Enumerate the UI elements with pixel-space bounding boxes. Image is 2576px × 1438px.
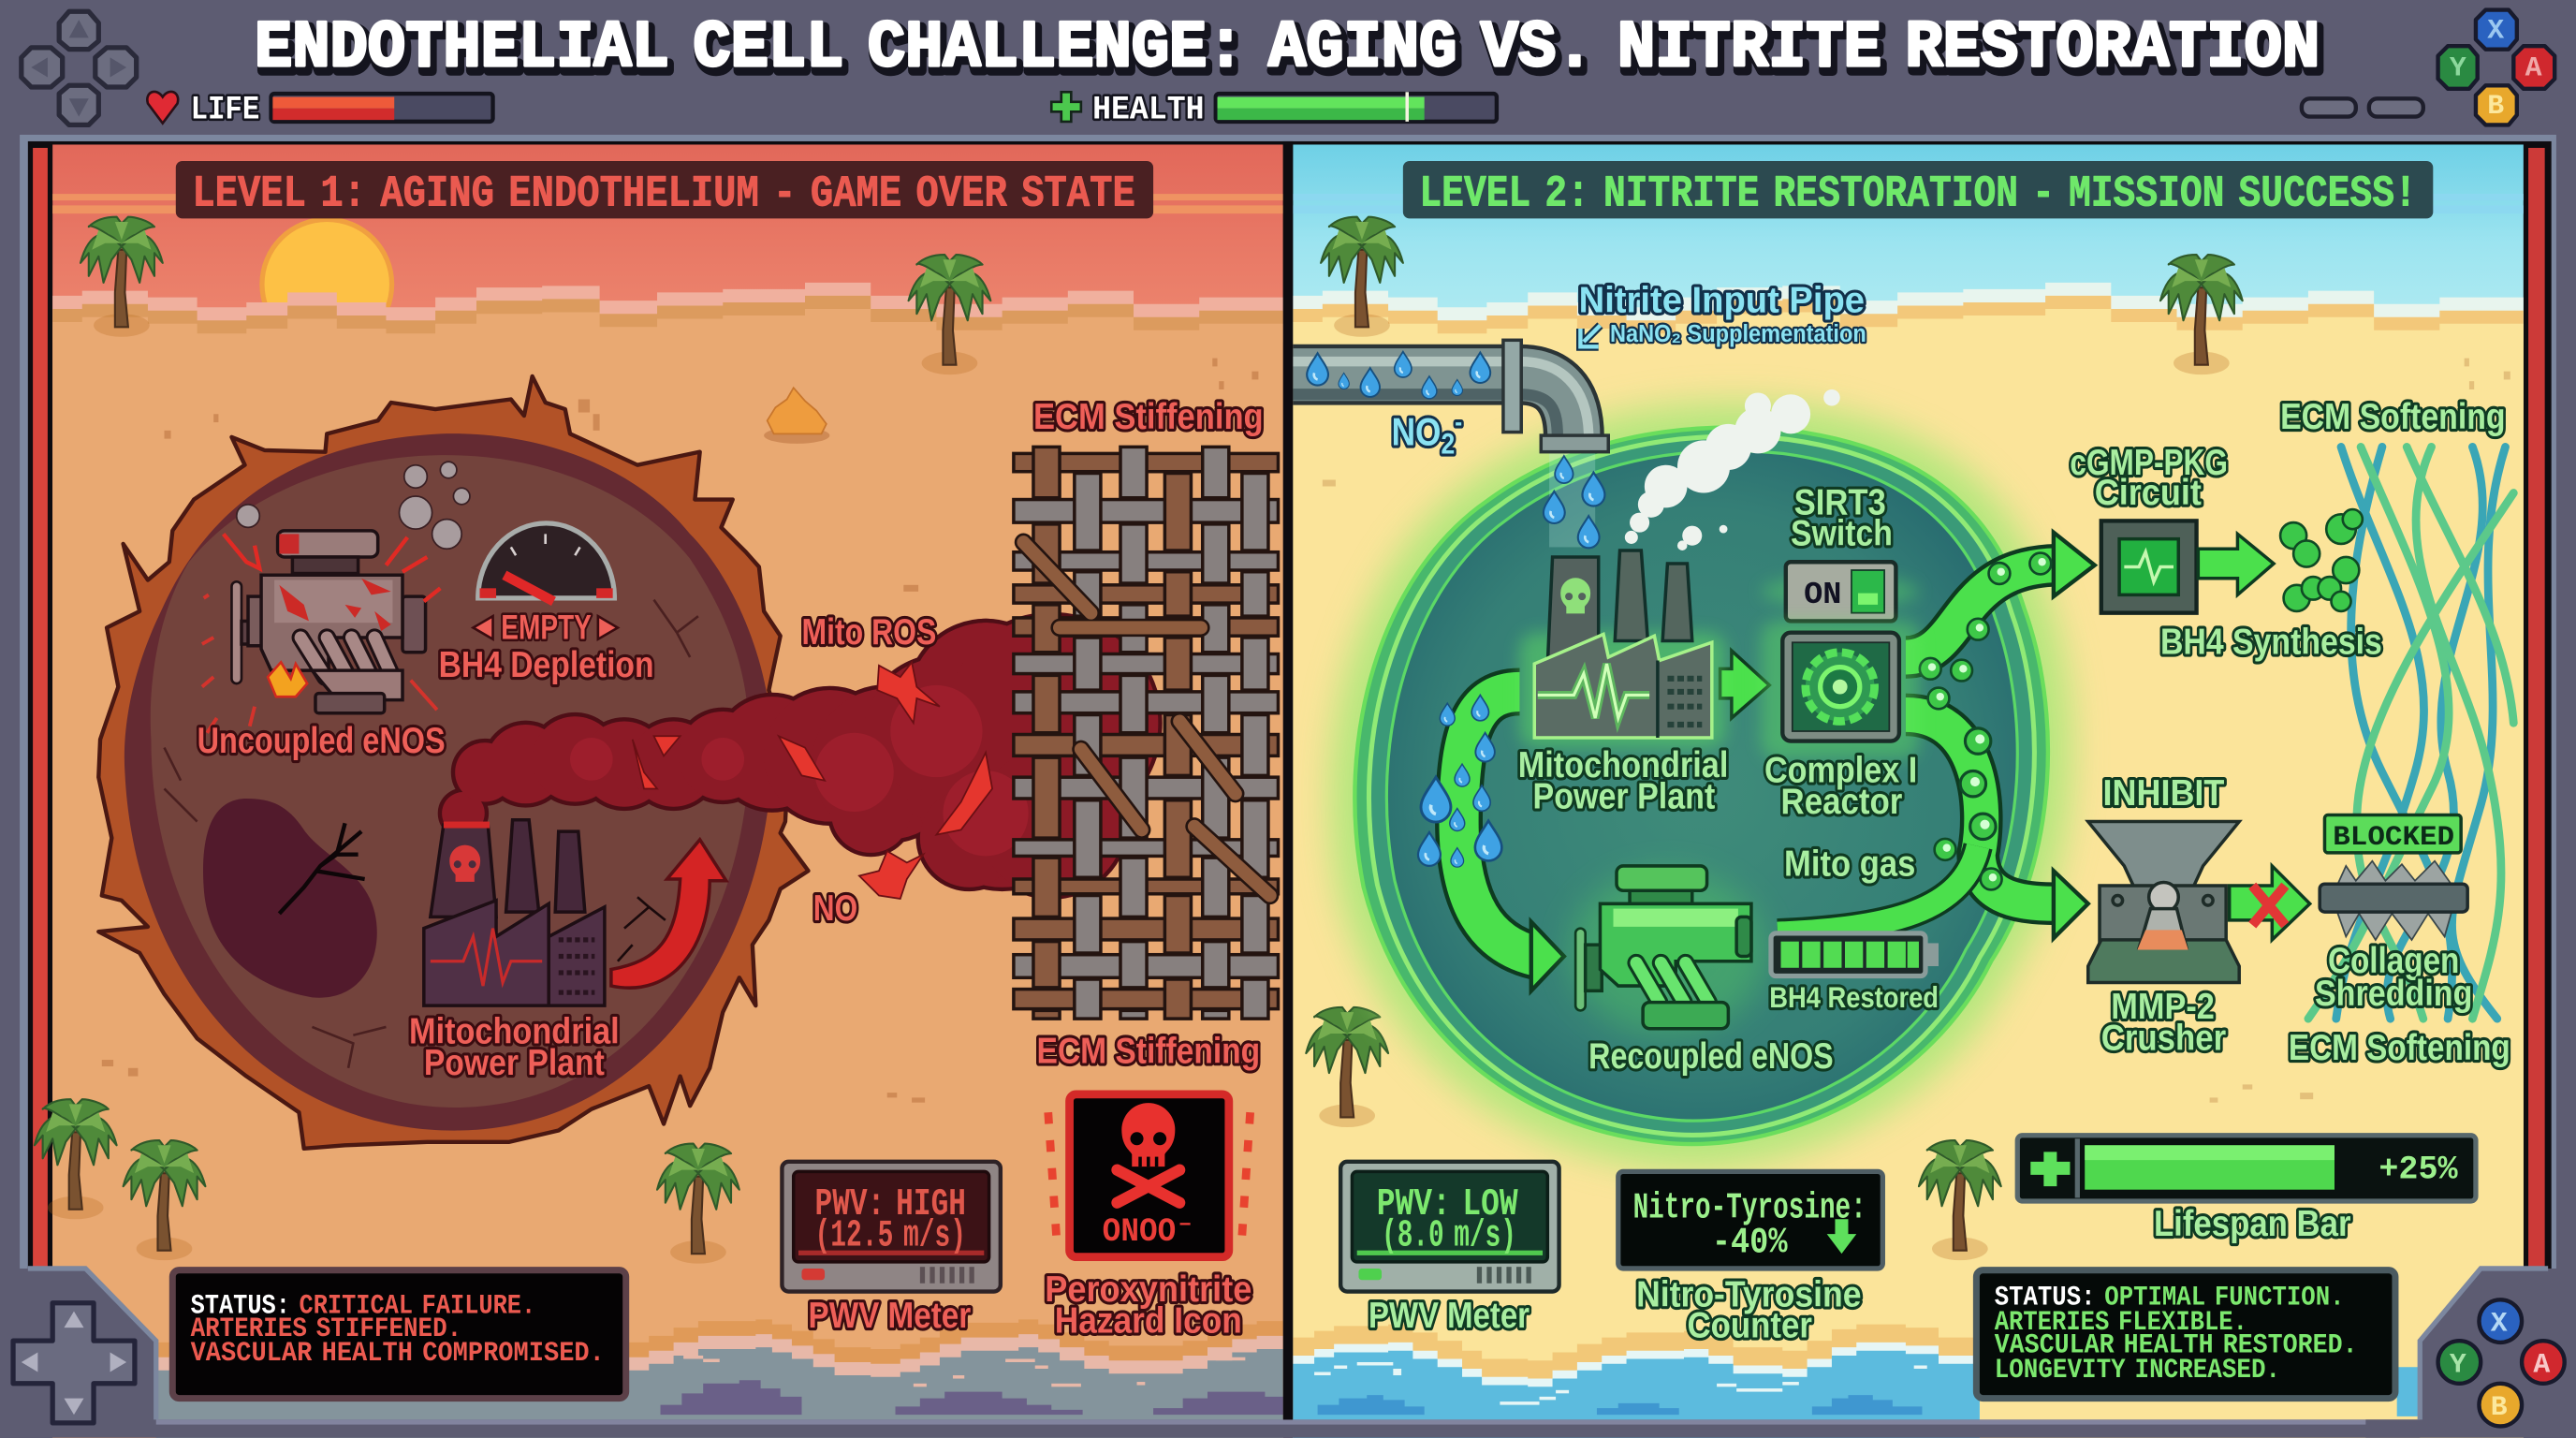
icon: d-pad <box>13 1303 135 1423</box>
sky stripes <box>52 194 1283 213</box>
blocked arrow <box>2230 866 2310 940</box>
mito gas bubbles <box>1920 553 2051 889</box>
title: ENDOTHELIAL CELL CHALLENGE: AGING VS. NITRITE RESTORATION <box>258 17 2323 91</box>
label: cGMP-PKG circuit <box>2070 443 2228 513</box>
PWV meter low: PWV: LOW <box>1377 1183 1518 1226</box>
SIRT3 switch: ON <box>1804 578 1841 613</box>
label: peroxynitrite hazard icon: Hazard Icon <box>1055 1300 1242 1341</box>
label: BH4 restored: BH4 Restored <box>1769 980 1939 1014</box>
label: nitro-tyrosine counter: Counter <box>1687 1306 1812 1346</box>
button X: X <box>2491 1308 2508 1340</box>
label: complex I reactor <box>1764 750 1917 822</box>
label: ECM stiffening top: ECM Stiffening <box>1033 397 1264 437</box>
top buttons <box>2438 10 2554 125</box>
banner: level 1: LEVEL 1: AGING ENDOTHELIUM - GAME OVER STATE <box>192 169 1135 219</box>
sun <box>259 217 394 352</box>
label: cGMP-PKG circuit: cGMP-PKG <box>2070 443 2228 483</box>
label: uncoupled eNOS: Uncoupled eNOS <box>198 721 446 761</box>
shoreline band <box>52 296 1283 1438</box>
foam line <box>1293 283 2524 1438</box>
status box right <box>1976 1270 2395 1399</box>
falling droplets <box>1544 456 1604 548</box>
palm tree <box>909 255 990 374</box>
status box left: STATUS: CRITICAL FAILURE. <box>191 1289 535 1321</box>
PWV meter high <box>782 1162 1001 1292</box>
sky stripes <box>1293 194 2524 213</box>
label: collagen shredding <box>2315 941 2472 1014</box>
label: peroxynitrite hazard icon <box>1045 1269 1251 1341</box>
label: collagen shredding: Shredding <box>2315 974 2472 1014</box>
status box right: STATUS: OPTIMAL FUNCTION. <box>1995 1282 2345 1313</box>
nitro-tyrosine counter: -40% <box>1712 1222 1788 1263</box>
label: nitrite input pipe: Nitrite Input Pipe <box>1579 280 1865 320</box>
pipe: nitrite input <box>1293 340 1608 452</box>
panel: level 1 aging endothelium <box>35 0 1283 1438</box>
palm tree <box>80 217 163 337</box>
button X <box>2479 1299 2522 1343</box>
icon: heart <box>147 92 178 124</box>
label: complex I reactor: Complex I <box>1764 750 1917 790</box>
label: mito gas: Mito gas <box>1784 844 1915 884</box>
top buttons: Y <box>2450 52 2466 84</box>
label: inhibit: INHIBIT <box>2103 773 2225 814</box>
label: lifespan bar: Lifespan Bar <box>2154 1204 2351 1244</box>
top buttons: B <box>2487 90 2504 122</box>
PWV meter high: PWV: HIGH <box>815 1183 966 1226</box>
collagen shredder <box>2320 861 2467 940</box>
nitro-tyrosine counter <box>1618 1171 1882 1269</box>
reactive shards <box>633 662 992 899</box>
palm tree <box>1321 217 1403 337</box>
top d-pad <box>22 11 137 125</box>
PWV meter high: (12.5 m/s) <box>815 1214 966 1257</box>
button B <box>2479 1384 2522 1426</box>
label: mitochondrial power plant <box>1518 745 1728 817</box>
label: ECM stiffening bottom: ECM Stiffening <box>1036 1032 1260 1072</box>
droplets in pipe <box>1307 352 1490 399</box>
hazard icon peroxynitrite: ONOO⁻ <box>1103 1213 1194 1251</box>
console bottom right corner <box>2365 1269 2576 1438</box>
shoreline band <box>1293 296 2524 1438</box>
hazard icon peroxynitrite <box>1048 1094 1251 1257</box>
SIRT3 switch <box>1761 562 1919 621</box>
palm tree <box>35 1099 117 1219</box>
button A: A <box>2533 1349 2550 1381</box>
panel: level 2 nitrite restoration <box>1293 144 2524 1438</box>
battery BH4 restored <box>1771 933 1939 976</box>
palm tree <box>2160 255 2243 374</box>
label: nitrite ion: 2 <box>1441 426 1455 460</box>
red arrow up <box>611 840 726 988</box>
foam line <box>52 283 1283 1438</box>
arrow to BH4 synthesis <box>2198 534 2274 594</box>
sky <box>1293 144 2524 342</box>
factory: mitochondrial power plant <box>1534 550 1712 738</box>
MMP-2 crusher <box>2088 822 2239 983</box>
icon: recoupled engine <box>1569 866 1766 1035</box>
ECM softening strands <box>2308 447 2513 1019</box>
button B: B <box>2491 1391 2508 1423</box>
label: nitro-tyrosine counter: Nitro-Tyrosine <box>1636 1274 1862 1314</box>
label: mitochondrial power plant: Power Plant <box>1533 777 1715 817</box>
label: collagen shredding: Collagen <box>2328 941 2459 981</box>
icon: broken engine <box>202 0 440 733</box>
label: recoupled eNOS: Recoupled eNOS <box>1588 1036 1834 1077</box>
button A <box>2522 1341 2565 1384</box>
complex I reactor <box>1761 621 1919 759</box>
label: SIRT3 switch <box>1791 482 1893 554</box>
sky <box>52 144 1283 342</box>
factory glow <box>1519 633 1725 748</box>
palm tree <box>1306 1007 1388 1127</box>
label: nitro-tyrosine counter <box>1636 1274 1862 1346</box>
label: cGMP-PKG circuit: Circuit <box>2095 473 2202 513</box>
sand speckles <box>1323 359 2510 1103</box>
blocked badge: BLOCKED <box>2333 821 2454 853</box>
palm tree <box>1919 1140 2001 1260</box>
white steam <box>1625 389 1840 550</box>
icon: empty BH4 gauge <box>478 523 614 601</box>
rock <box>764 388 829 444</box>
PWV meter low: (8.0 m/s) <box>1382 1214 1516 1257</box>
smoke plume <box>442 616 1158 896</box>
status box left <box>172 1270 626 1399</box>
button Y: Y <box>2450 1349 2466 1381</box>
cell: healthy endothelial cell <box>1330 389 2095 1169</box>
engine exhaust puffs <box>237 462 470 549</box>
nucleus <box>203 799 377 998</box>
title: ENDOTHELIAL CELL CHALLENGE: AGING VS. NITRITE RESTORATION <box>255 12 2320 86</box>
PWV meter low <box>1340 1162 1559 1292</box>
label: ECM softening bottom: ECM Softening <box>2289 1028 2510 1068</box>
label: mitochondrial power plant <box>409 1011 620 1083</box>
divider between levels <box>1283 141 1293 1419</box>
button Y <box>2438 1341 2481 1384</box>
health bar <box>1051 91 1497 128</box>
lifespan bar <box>2017 1136 2476 1201</box>
health bar: HEALTH <box>1092 91 1204 128</box>
label: BH4 depletion: BH4 Depletion <box>439 645 654 685</box>
label: peroxynitrite hazard icon: Peroxynitrite <box>1045 1269 1251 1310</box>
status box left: ARTERIES STIFFENED. <box>191 1313 461 1344</box>
status box right: ARTERIES FLEXIBLE. <box>1995 1306 2247 1338</box>
label: empty: EMPTY <box>501 609 592 647</box>
life bar <box>147 91 493 128</box>
label: mitochondrial power plant: Mitochondrial <box>1518 745 1728 785</box>
sea <box>156 1319 1283 1438</box>
ECM stiffened lattice <box>1014 447 1278 1019</box>
top buttons: A <box>2525 52 2542 84</box>
label: SIRT3 switch: SIRT3 <box>1794 482 1886 522</box>
arrow to circuit <box>1906 533 2095 657</box>
label: PWV meter: PWV Meter <box>809 1296 971 1336</box>
nitro-tyrosine counter: Nitro-Tyrosine: <box>1633 1188 1866 1229</box>
label: ECM softening top: ECM Softening <box>2280 397 2506 437</box>
label: mitochondrial power plant: Mitochondrial <box>409 1011 620 1051</box>
label: NaNO2 supplementation: NaNO₂ Supplementation <box>1610 319 1866 347</box>
top buttons: X <box>2487 14 2504 46</box>
status box left: VASCULAR HEALTH COMPROMISED. <box>191 1337 605 1369</box>
label: MMP-2 crusher: MMP-2 <box>2111 987 2215 1027</box>
label: MMP-2 crusher <box>2101 987 2226 1059</box>
label: SIRT3 switch: Switch <box>1791 514 1893 554</box>
arrow to crusher <box>1906 714 2088 938</box>
chip: cGMP-PKG circuit <box>2101 521 2197 613</box>
label: nitrite ion: - <box>1455 407 1462 436</box>
nitrite droplets <box>1418 695 1501 867</box>
droplet flow arrow <box>1459 692 1564 990</box>
label: BH4 synthesis: BH4 Synthesis <box>2160 623 2382 663</box>
status box right: LONGEVITY INCREASED. <box>1995 1354 2280 1386</box>
arrow to reactor <box>1720 651 1769 718</box>
sea <box>1293 1325 2420 1438</box>
BH4 molecules <box>2280 509 2363 611</box>
label: PWV meter: PWV Meter <box>1368 1296 1530 1336</box>
cell cracks <box>165 600 698 1068</box>
factory: mitochondrial power plant <box>424 820 605 1005</box>
sand speckles <box>102 359 1258 1103</box>
status box right: VASCULAR HEALTH RESTORED. <box>1995 1328 2358 1360</box>
palm tree <box>657 1144 739 1264</box>
lifespan bar: +25% <box>2378 1151 2459 1188</box>
palm tree <box>124 1140 205 1260</box>
label: mitochondrial power plant: Power Plant <box>424 1043 605 1083</box>
label: nitrite ion: NO <box>1392 410 1451 454</box>
console bottom left corner <box>0 1269 2420 1438</box>
label: MMP-2 crusher: Crusher <box>2101 1019 2226 1059</box>
sand <box>52 309 1283 1438</box>
branch to battery <box>1778 846 1978 933</box>
start and select buttons <box>2302 98 2423 117</box>
label: NO: NO <box>813 888 857 929</box>
life bar: LIFE <box>191 91 259 128</box>
label: mito ROS: Mito ROS <box>801 612 936 653</box>
cell: aged endothelial cell <box>98 0 1158 1149</box>
banner: level 2: LEVEL 2: NITRITE RESTORATION - MISSION SUCCESS! <box>1419 169 2417 219</box>
label: complex I reactor: Reactor <box>1781 782 1902 822</box>
icon: plus <box>1051 92 1081 122</box>
water stream <box>1549 448 1595 547</box>
sand <box>1293 309 2524 1438</box>
